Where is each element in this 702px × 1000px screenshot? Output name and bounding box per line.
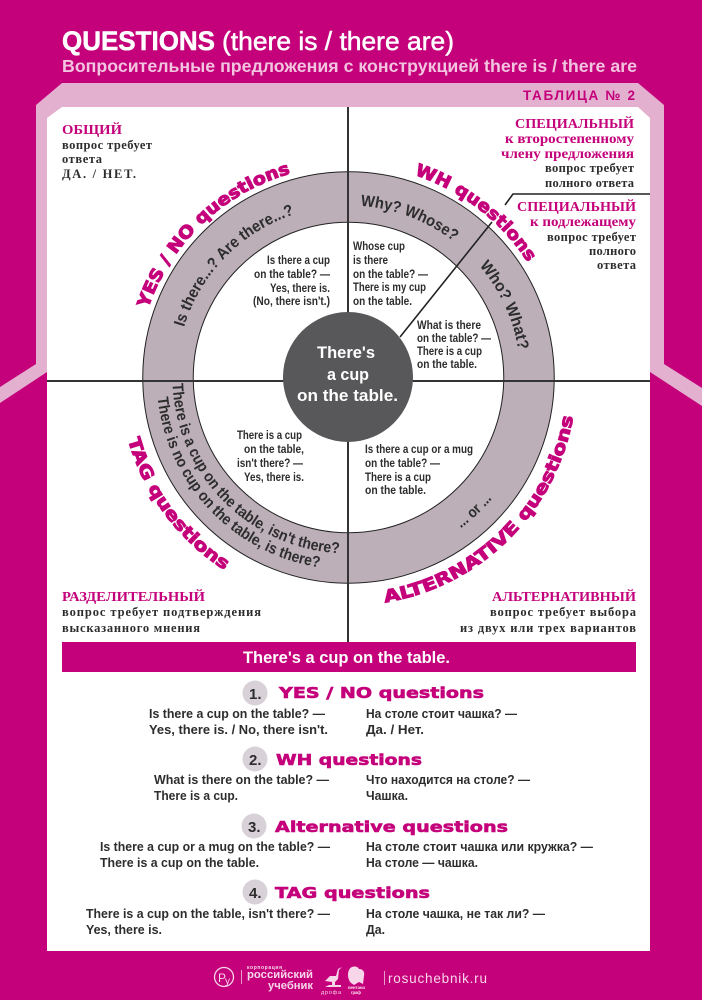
- example: whose: on the table? —: [353, 267, 428, 281]
- note: tag: РАЗДЕЛИТЕЛЬНЫЙ: [62, 588, 205, 605]
- icon: publisher seal: [214, 968, 234, 987]
- text 1: [149, 706, 517, 737]
- publisher name: корпорация: [247, 965, 282, 971]
- subtitle: Вопросительные предложения с конструкцией there is / there are: [62, 56, 637, 76]
- centre disc: on the table.: [297, 386, 398, 405]
- note: special secondary: СПЕЦИАЛЬНЫЙ: [515, 115, 634, 132]
- text 4: На столе чашка, не так ли? —: [366, 906, 545, 921]
- example: what: What is there: [417, 318, 481, 332]
- note: special secondary: [501, 115, 635, 190]
- text 2: There is a cup.: [154, 788, 238, 803]
- ring text: tag negative: There is no cup on the table, is there?: [158, 396, 320, 567]
- example: tag: isn't there? —: [237, 456, 303, 470]
- publisher name: [241, 965, 313, 992]
- text 2: Чашка.: [366, 788, 408, 803]
- table label: ТАБЛИЦА № 2: [523, 88, 635, 103]
- example: alternative: Is there a cup or a mug: [365, 442, 473, 456]
- note: general: [62, 122, 152, 181]
- text 3: There is a cup on the table.: [100, 855, 259, 870]
- example: alternative: on the table.: [365, 483, 426, 497]
- text 1: Yes, there is. / No, there isn't.: [149, 722, 328, 737]
- note: tag: вопрос требует подтверждения: [62, 605, 261, 619]
- note: special subject: [517, 198, 637, 272]
- icon: publisher seal: у: [225, 976, 230, 987]
- note: special subject: СПЕЦИАЛЬНЫЙ: [517, 198, 636, 215]
- item 3: [100, 814, 593, 870]
- number badge 1: [242, 680, 268, 706]
- centre disc: There's: [317, 343, 375, 362]
- item 2: [154, 746, 530, 803]
- note: tag: [62, 588, 261, 635]
- curved heading: wh: WH questions: [417, 162, 535, 262]
- example: whose: is there: [353, 253, 388, 267]
- number badge 4: 4.: [249, 885, 262, 902]
- text 4: [86, 906, 545, 937]
- icon: griffin: [348, 966, 365, 995]
- number badge 1: 1.: [249, 686, 262, 703]
- title: (there is / there are): [222, 26, 454, 56]
- text 3: Is there a cup or a mug on the table? —: [100, 839, 330, 854]
- example: whose: on the table.: [353, 294, 412, 308]
- note: general: ДА. / НЕТ.: [62, 167, 136, 181]
- ring text: why whose: Why? Whose?: [362, 194, 458, 240]
- number badge 3: 3.: [248, 819, 261, 836]
- icon: publisher seal: Р: [218, 971, 226, 985]
- white panel: [47, 107, 650, 951]
- note: alternative: [460, 588, 637, 635]
- number badge 2: [242, 746, 268, 772]
- item 4: [86, 880, 545, 937]
- text 4: Yes, there is.: [86, 922, 162, 937]
- heading 1: YES / NO questions: [278, 684, 484, 702]
- example: alternative: on the table? —: [365, 456, 440, 470]
- example: alternative: [365, 442, 473, 497]
- example sentence bar: [62, 642, 636, 672]
- example: alternative: There is a cup: [365, 470, 431, 484]
- example: what: [417, 318, 491, 371]
- text 3: На столе — чашка.: [366, 855, 478, 870]
- circle diagram: [47, 107, 650, 642]
- heading 2: WH questions: [276, 751, 422, 769]
- icon: bird: [321, 967, 342, 996]
- ring: [168, 197, 529, 558]
- text 2: [154, 772, 530, 803]
- number badge 4: [242, 880, 268, 904]
- note: general: ОБЩИЙ: [62, 122, 123, 137]
- quadrant axes: [47, 107, 650, 642]
- text 4: There is a cup on the table, isn't there? —: [86, 906, 330, 921]
- example: yes no: on the table? —: [254, 267, 330, 281]
- example: tag: on the table,: [244, 442, 304, 456]
- text 2: What is there on the table? —: [154, 772, 329, 787]
- title: QUESTIONS: [62, 26, 215, 56]
- note: special subject: ответа: [597, 258, 637, 272]
- example sentence bar: There's a cup on the table.: [243, 648, 450, 667]
- icon: bird: дрофа: [321, 990, 342, 996]
- icon: griffin: граф: [351, 989, 361, 995]
- example: what: There is a cup: [417, 344, 482, 358]
- text 3: На столе стоит чашка или кружка? —: [366, 839, 593, 854]
- example: whose: There is my cup: [353, 280, 426, 294]
- callout line: [400, 194, 650, 337]
- note: alternative: вопрос требует выбора: [490, 605, 637, 619]
- icon: griffin: вентана: [348, 985, 365, 990]
- centre disc: a cup: [327, 365, 369, 384]
- footer logos: [214, 965, 487, 996]
- heading 4: TAG questions: [275, 884, 430, 902]
- example: yes no: Is there a cup: [267, 253, 330, 267]
- heading 3: Alternative questions: [275, 818, 508, 836]
- example: tag: There is a cup: [237, 428, 302, 442]
- text 1: На столе стоит чашка? —: [366, 706, 517, 721]
- note: special subject: полного: [589, 244, 636, 258]
- publisher name: учебник: [268, 980, 313, 992]
- centre disc: [283, 312, 413, 442]
- curved heading: yes no: YES / NO questions: [136, 164, 290, 305]
- note: special secondary: вопрос требует: [545, 161, 634, 175]
- example: what: on the table.: [417, 357, 477, 371]
- example: what: on the table? —: [417, 331, 491, 345]
- title: [62, 26, 454, 56]
- ring text: tag positive: There is a cup on the table, isn't there?: [172, 383, 340, 553]
- note: special secondary: к второстепенному: [505, 132, 634, 147]
- text 1: Is there a cup on the table? —: [149, 706, 325, 721]
- text 1: Да. / Нет.: [366, 722, 424, 737]
- example: whose: [353, 239, 428, 308]
- publisher name: российский: [247, 969, 313, 981]
- frame band: [0, 83, 702, 406]
- website: rosuchebnik.ru: [388, 971, 487, 986]
- note: general: ответа: [62, 152, 103, 166]
- example: yes no: [253, 253, 330, 308]
- item 1: [149, 680, 517, 737]
- ring text: who what: Who? What?: [481, 259, 529, 348]
- curved heading: tag: TAG questions: [128, 435, 229, 569]
- example: tag: [237, 428, 304, 484]
- example: yes no: Yes, there is.: [270, 281, 330, 295]
- note: alternative: АЛЬТЕРНАТИВНЫЙ: [492, 588, 636, 605]
- note: special subject: вопрос требует: [547, 230, 636, 244]
- note: alternative: из двух или трех вариантов: [460, 621, 636, 635]
- text 2: Что находится на столе? —: [366, 772, 530, 787]
- text 4: Да.: [366, 922, 385, 937]
- ring text: yes no: Is there...? Are there...?: [174, 204, 291, 326]
- example: tag: Yes, there is.: [244, 470, 304, 484]
- example: whose: Whose cup: [353, 239, 405, 253]
- note: general: вопрос требует: [62, 138, 152, 152]
- ring text: or: ... or ...: [460, 498, 492, 528]
- number badge 3: [242, 814, 266, 838]
- note: special secondary: члену предложения: [501, 147, 634, 162]
- note: tag: высказанного мнения: [62, 621, 200, 635]
- number badge 2: 2.: [249, 752, 262, 769]
- note: special secondary: полного ответа: [545, 176, 635, 190]
- curved heading: alternative: ALTERNATIVE questions: [384, 416, 573, 604]
- example: yes no: (No, there isn't.): [253, 294, 330, 308]
- note: special subject: к подлежащему: [530, 215, 636, 230]
- text 3: [100, 839, 593, 870]
